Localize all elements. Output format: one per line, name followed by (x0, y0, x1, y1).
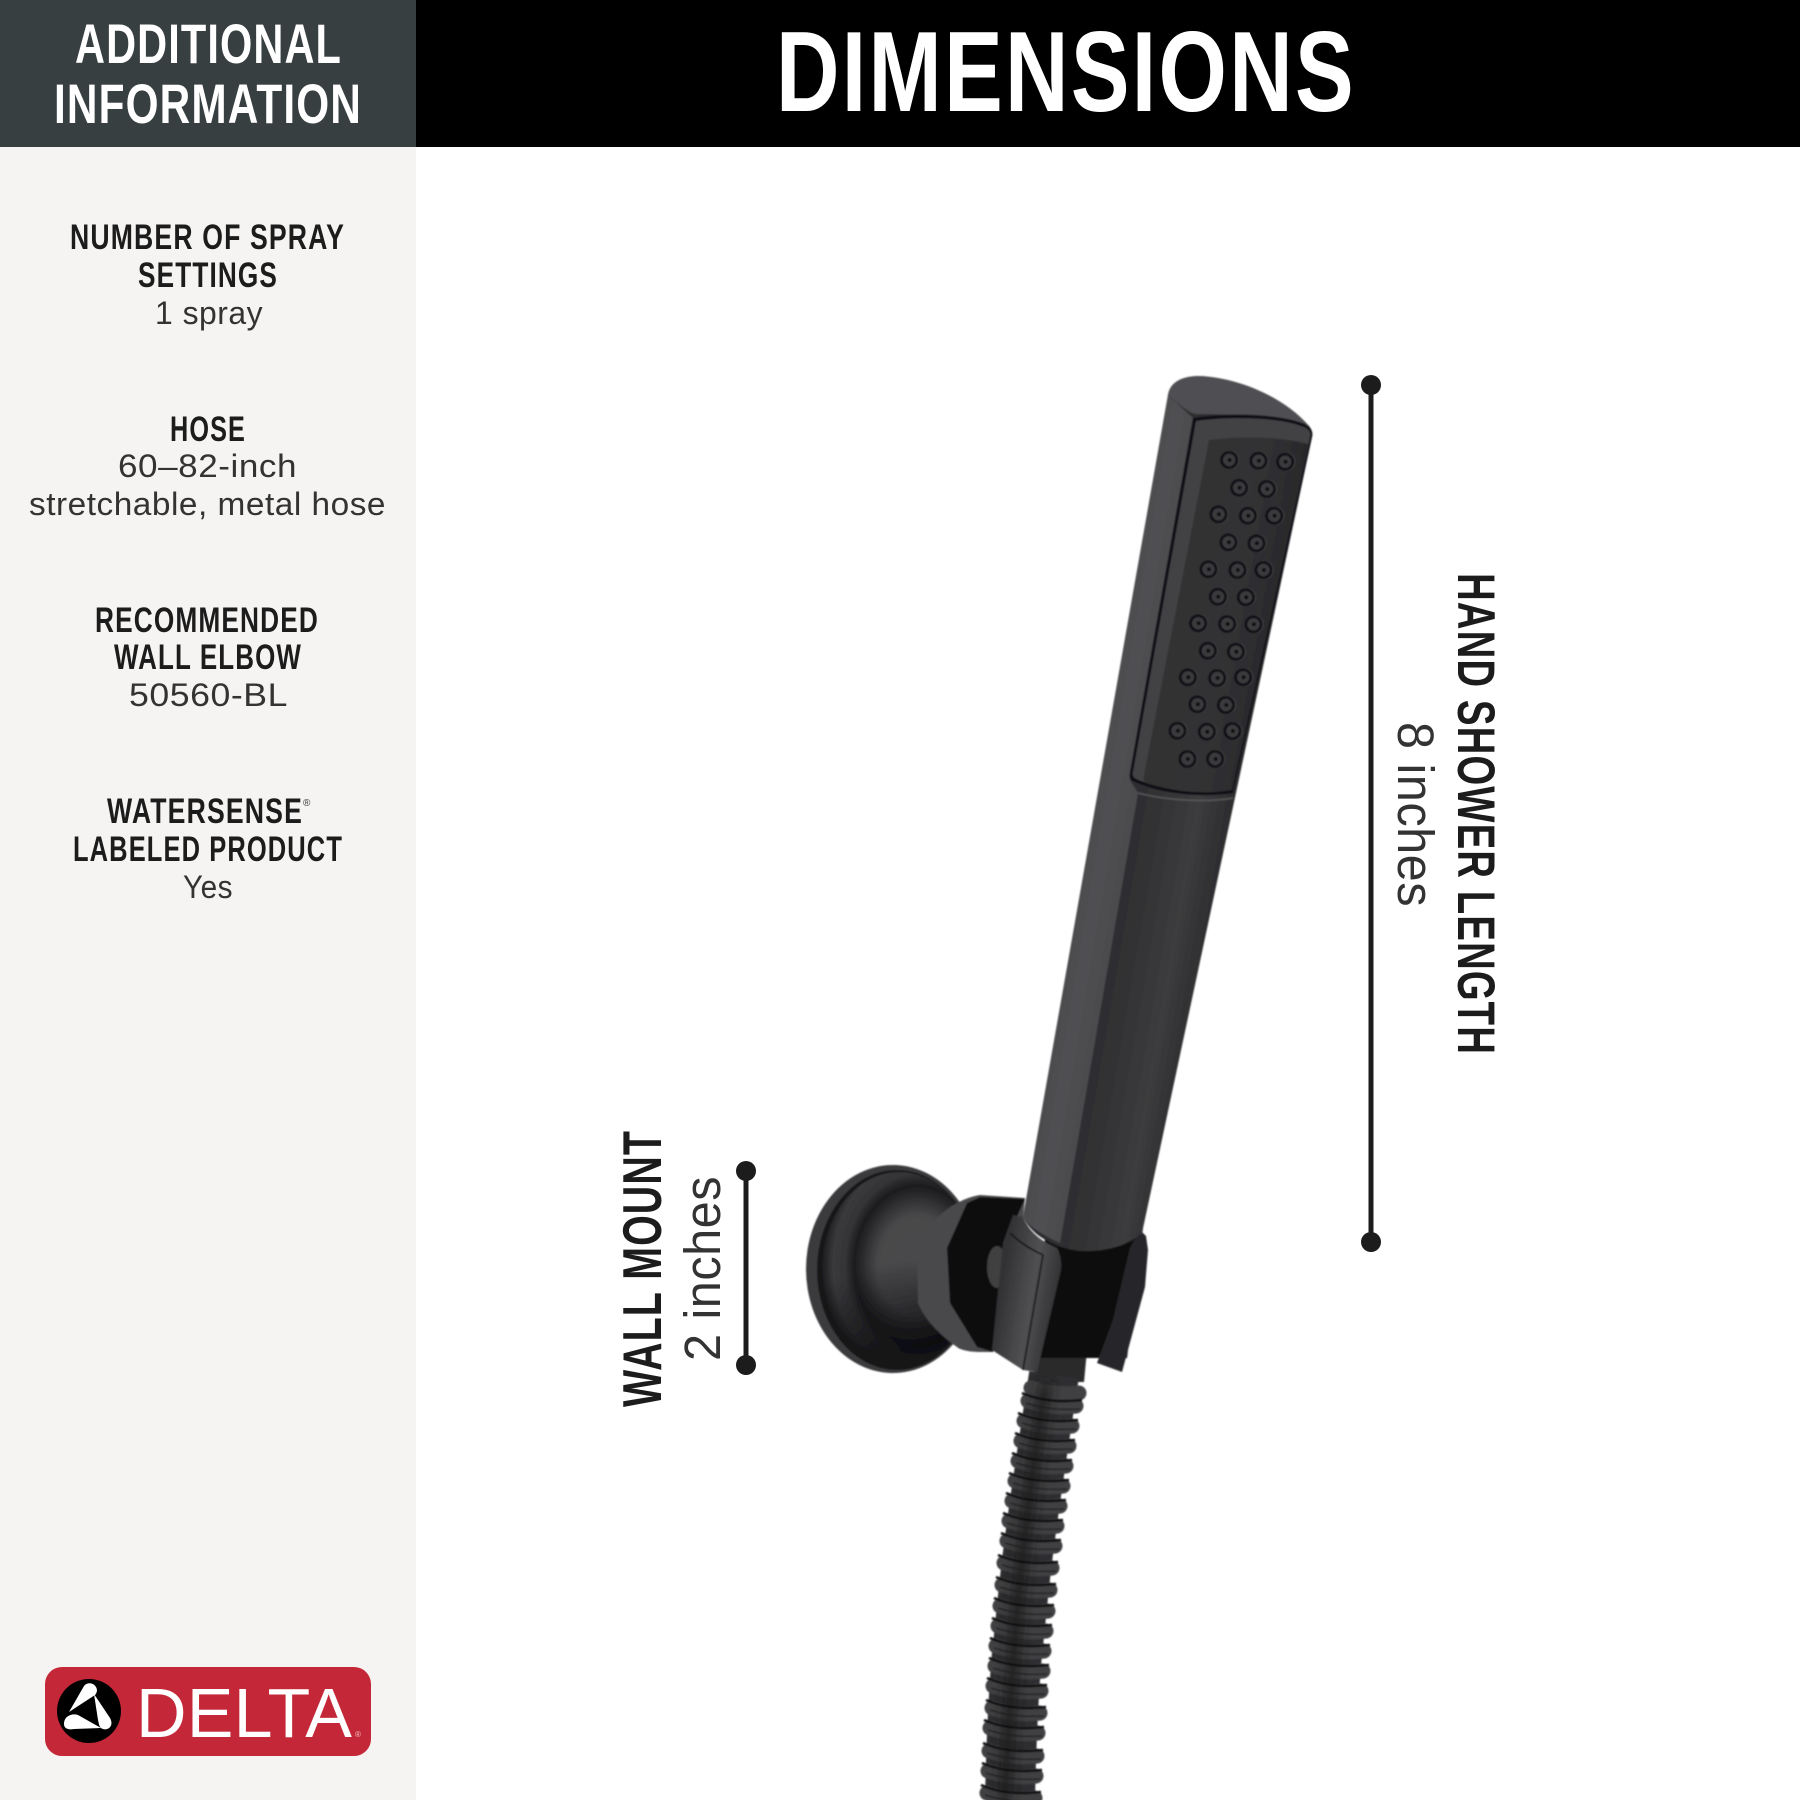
spec: recommended wall elbow: WALL ELBOW (114, 638, 302, 677)
header band: additional information: INFORMATION (54, 72, 362, 135)
handle side facet (1023, 395, 1193, 1243)
spec: number of spray settings (70, 218, 345, 331)
product: hand shower with wall mount and hose (806, 376, 1312, 1800)
spec: hose (29, 410, 386, 522)
header band: dimensions: DIMENSIONS (776, 9, 1356, 136)
dimension line: hand shower length (1361, 375, 1381, 1252)
spec: watersense labeled product: Yes (183, 869, 233, 905)
spray nozzles (1168, 450, 1296, 768)
spec: recommended wall elbow: RECOMMENDED (95, 601, 319, 640)
spec: watersense labeled product (73, 792, 343, 905)
label: wall mount: WALL MOUNT (611, 1130, 673, 1407)
holder: center and right wing (1040, 1228, 1148, 1372)
label: 8 inches: 8 inches (1387, 722, 1444, 907)
spec: recommended wall elbow: 50560-BL (129, 677, 288, 713)
delta logo: DELTA (136, 1674, 352, 1752)
flexible hose (981, 1350, 1087, 1800)
spec: number of spray settings: SETTINGS (138, 256, 278, 295)
spray face plate (1130, 415, 1312, 800)
sidebar background (0, 0, 416, 1800)
label: 2 inches: 2 inches (674, 1176, 731, 1361)
holder: left wing (992, 1215, 1061, 1372)
delta logo (45, 1667, 371, 1756)
wall flange (806, 1165, 980, 1373)
label: hand shower length: HAND SHOWER LENGTH (1446, 573, 1505, 1055)
spec: number of spray settings: 1 spray (155, 295, 263, 331)
spray head top cap (1168, 376, 1309, 426)
dimension line: wall mount (736, 1161, 756, 1375)
spec: watersense labeled product: ® (303, 798, 311, 809)
handle body (1023, 376, 1312, 1251)
spec: hose: 60–82-inch (118, 448, 297, 484)
spec: hose: stretchable, metal hose (29, 486, 386, 522)
spec: watersense labeled product: LABELED PRODUCT (73, 830, 343, 869)
header band: additional information: ADDITIONAL (75, 12, 342, 75)
spec: watersense labeled product: WATERSENSE (107, 792, 303, 831)
header band: dimensions (416, 0, 1800, 147)
header band: additional information (0, 0, 416, 147)
spec: recommended wall elbow (95, 601, 319, 713)
spec: number of spray settings: NUMBER OF SPRAY (70, 218, 345, 257)
spec: hose: HOSE (170, 410, 246, 449)
wall mount neck (917, 1195, 1025, 1352)
delta logo: ® (355, 1730, 361, 1739)
